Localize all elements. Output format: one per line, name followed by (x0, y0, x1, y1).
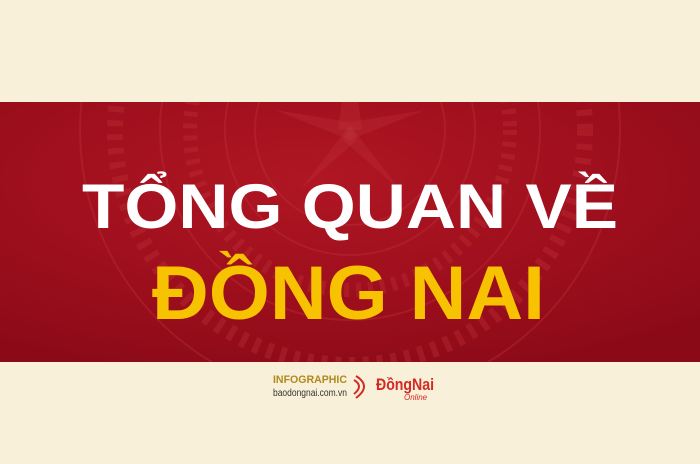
logo: Dong Nai Online: Online (404, 393, 428, 402)
footer: infographic label: INFOGRAPHIC (273, 374, 347, 386)
footer: infographic label (273, 374, 347, 399)
logo: Dong Nai Online: ĐồngNai (376, 375, 434, 394)
footer: infographic label: baodongnai.com.vn (273, 388, 347, 399)
infographic cover (0, 102, 700, 400)
title line 2: ĐỒNG NAI (152, 251, 545, 336)
title line 1: TỔNG QUAN VỀ (82, 171, 618, 242)
red banner (0, 102, 700, 362)
decorative bronze drum pattern (79, 102, 621, 362)
logo: Dong Nai Online (354, 375, 434, 402)
